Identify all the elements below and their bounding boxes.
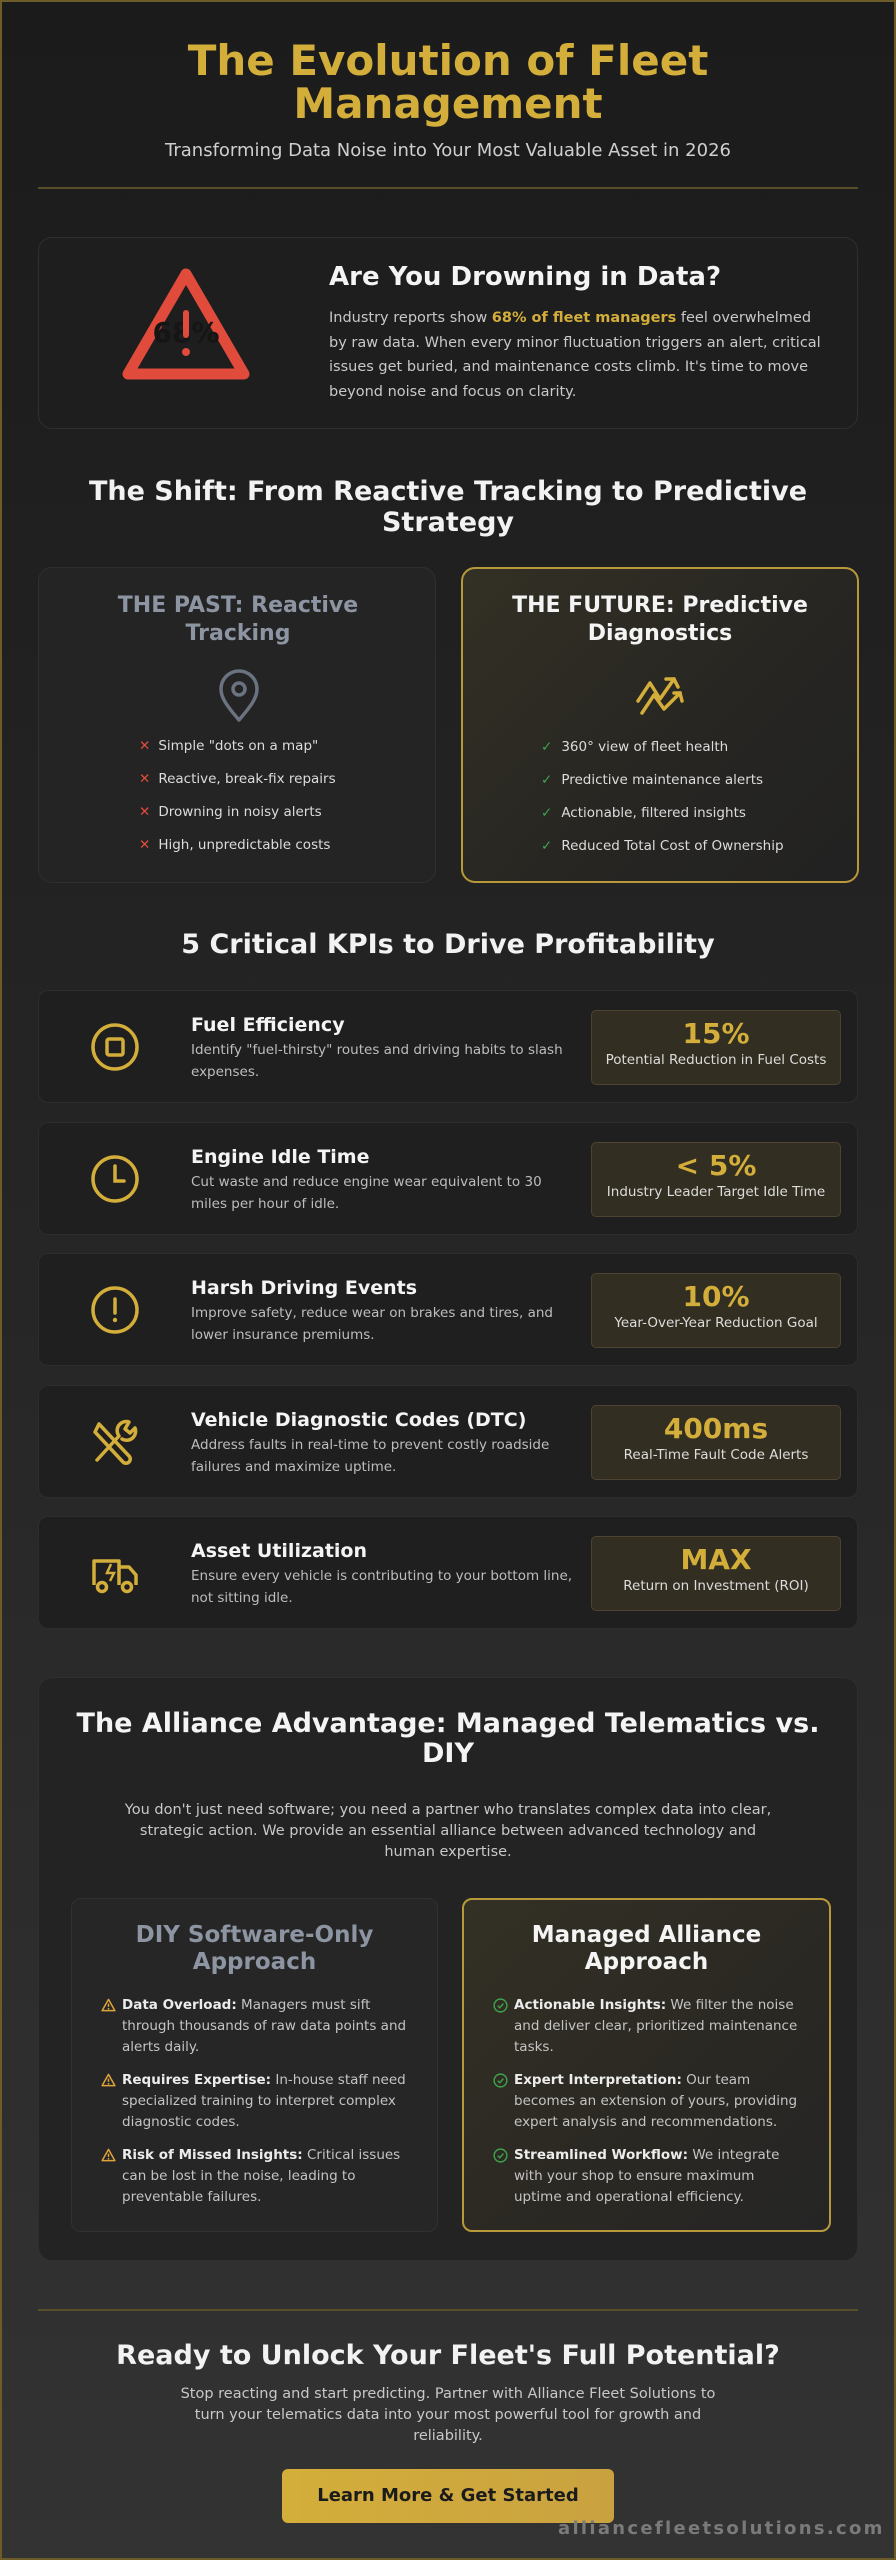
- kpi: asset utilization: MAX: [680, 1543, 752, 1576]
- body text: Industry reports show 68% of fleet managers feel overwhelmed by raw data. When every minor fluctuation triggers an alert, critical issues get buried, and maintenance costs climb. It's time to move beyond noise and focus on clarity.: [329, 310, 821, 400]
- CTA button: Learn More & Get Started: [317, 2485, 579, 2506]
- heading: the shift: Strategy: [382, 507, 514, 538]
- heading: the shift: [89, 476, 807, 538]
- subtitle: Transforming Data Noise into Your Most Valuable Asset in 2026: [165, 140, 731, 161]
- kpi: asset utilization: [38, 1516, 858, 1629]
- future list: ✓ 360° view of fleet health: [541, 739, 728, 755]
- icon: warning triangle: [122, 268, 250, 380]
- panel: DIY approach: Risk of Missed Insights: Critical issues can be lost in the noise, leading to preventable failures.: [122, 2147, 400, 2205]
- panel: DIY approach: [71, 1898, 438, 2232]
- kpi: fuel efficiency: 15%: [682, 1017, 750, 1050]
- alliance heading: [76, 1708, 819, 1769]
- panel: DIY approach: Requires Expertise: In-house staff need specialized training to interpret complex diagnostic codes.: [122, 2072, 406, 2130]
- panel: managed alliance approach: Actionable Insights: We filter the noise and deliver clear, prioritized maintenance tasks.: [514, 1997, 797, 2055]
- panel: DIY approach: DIY Software-Only: [136, 1922, 373, 1948]
- past heading: [118, 593, 358, 646]
- alliance heading: DIY: [422, 1738, 474, 1769]
- past list: [139, 738, 336, 853]
- kpi: harsh driving: 10%: [682, 1280, 750, 1313]
- future heading: THE FUTURE: Predictive: [512, 593, 808, 618]
- kpi: fuel efficiency: Fuel Efficiency: [191, 1014, 345, 1036]
- kpi: asset utilization: Asset Utilization: [191, 1540, 367, 1562]
- kpi: diagnostic codes: Vehicle Diagnostic Codes (DTC): [191, 1409, 526, 1431]
- panel: DIY approach: Data Overload: Managers must sift through thousands of raw data points and alerts daily.: [122, 1997, 406, 2055]
- past heading: Tracking: [186, 621, 290, 646]
- title: [188, 36, 708, 128]
- panel: managed alliance approach: Approach: [585, 1949, 708, 1975]
- kpi: fuel efficiency: Identify "fuel-thirsty" routes and driving habits to slash expenses.: [191, 1042, 563, 1080]
- CTA paragraph: Stop reacting and start predicting. Partner with Alliance Fleet Solutions to turn your telematics data into your most powerful tool for growth and reliability.: [181, 2386, 715, 2444]
- future list: ✓ Predictive maintenance alerts: [541, 772, 763, 788]
- kpi: engine idle time: Cut waste and reduce engine wear equivalent to 30 miles per hour of idle.: [191, 1174, 542, 1212]
- panel: drowning in data: [38, 237, 858, 429]
- future list: ✓ Reduced Total Cost of Ownership: [541, 838, 784, 854]
- panel: alliance advantage: [38, 1677, 858, 2261]
- heading: Are You Drowning in Data?: [329, 262, 721, 292]
- heading: the shift: The Shift: From Reactive Tracking to Predictive: [89, 476, 807, 507]
- heading: KPIs: 5 Critical KPIs to Drive Profitability: [181, 929, 715, 960]
- future list: [541, 739, 784, 854]
- alliance paragraph: You don't just need software; you need a partner who translates complex data into clear, strategic action. We provide an essential alliance between advanced technology and human expertise.: [125, 1802, 771, 1860]
- alliance heading: The Alliance Advantage: Managed Telematics vs.: [77, 1708, 819, 1739]
- past heading: THE PAST: Reactive: [118, 593, 358, 618]
- panel: managed alliance approach: Streamlined Workflow: We integrate with your shop to ensure maximum uptime and operational efficiency.: [514, 2147, 779, 2205]
- panel: managed alliance approach: [462, 1898, 831, 2232]
- icon: trend arrows: [636, 677, 684, 715]
- kpi: engine idle time: Engine Idle Time: [191, 1146, 370, 1168]
- kpi: fuel efficiency: Potential Reduction in Fuel Costs: [606, 1052, 826, 1068]
- panel: the past: [38, 567, 436, 883]
- panel: managed alliance approach: Managed Alliance: [532, 1922, 761, 1948]
- past list: ✕ Simple "dots on a map": [139, 738, 318, 754]
- future list: ✓ Actionable, filtered insights: [541, 805, 746, 821]
- kpi: harsh driving: Year-Over-Year Reduction Goal: [614, 1315, 818, 1331]
- kpi: diagnostic codes: Address faults in real-time to prevent costly roadside failures and maximize uptime.: [191, 1437, 549, 1475]
- icon: map pin: [219, 669, 259, 722]
- watermark: alliancefleetsolutions.com: [558, 2518, 885, 2539]
- kpi: asset utilization: Ensure every vehicle is contributing to your bottom line, not sitting idle.: [191, 1568, 572, 1606]
- title: The Evolution of Fleet: [188, 36, 708, 85]
- kpi: engine idle time: [38, 1122, 858, 1235]
- kpi: engine idle time: Industry Leader Target Idle Time: [607, 1184, 825, 1200]
- future heading: Diagnostics: [588, 621, 732, 646]
- panel: managed alliance approach: Expert Interpretation: Our team becomes an extension of yours, providing expert analysis and recommendations.: [514, 2072, 797, 2130]
- kpi: harsh driving: Harsh Driving Events: [191, 1277, 417, 1299]
- kpi: diagnostic codes: 400ms: [664, 1412, 768, 1445]
- panel: the future: [461, 567, 859, 883]
- past list: ✕ Reactive, break-fix repairs: [139, 771, 336, 787]
- icon: warning triangle: 68%: [152, 316, 220, 349]
- kpi: asset utilization: Return on Investment (ROI): [623, 1578, 809, 1594]
- CTA button: [282, 2469, 614, 2523]
- kpi: harsh driving: [38, 1253, 858, 1366]
- kpi: fuel efficiency: [38, 990, 858, 1103]
- kpi: diagnostic codes: Real-Time Fault Code Alerts: [624, 1447, 808, 1463]
- future heading: [512, 593, 808, 646]
- kpi: harsh driving: Improve safety, reduce wear on brakes and tires, and lower insurance premiums.: [191, 1305, 553, 1343]
- past list: ✕ High, unpredictable costs: [139, 837, 330, 853]
- CTA heading: Ready to Unlock Your Fleet's Full Potential?: [116, 2340, 780, 2371]
- kpi: engine idle time: < 5%: [676, 1149, 756, 1182]
- kpi: diagnostic codes: [38, 1385, 858, 1498]
- panel: DIY approach: Approach: [193, 1949, 316, 1975]
- title: Management: [293, 79, 603, 128]
- past list: ✕ Drowning in noisy alerts: [139, 804, 322, 820]
